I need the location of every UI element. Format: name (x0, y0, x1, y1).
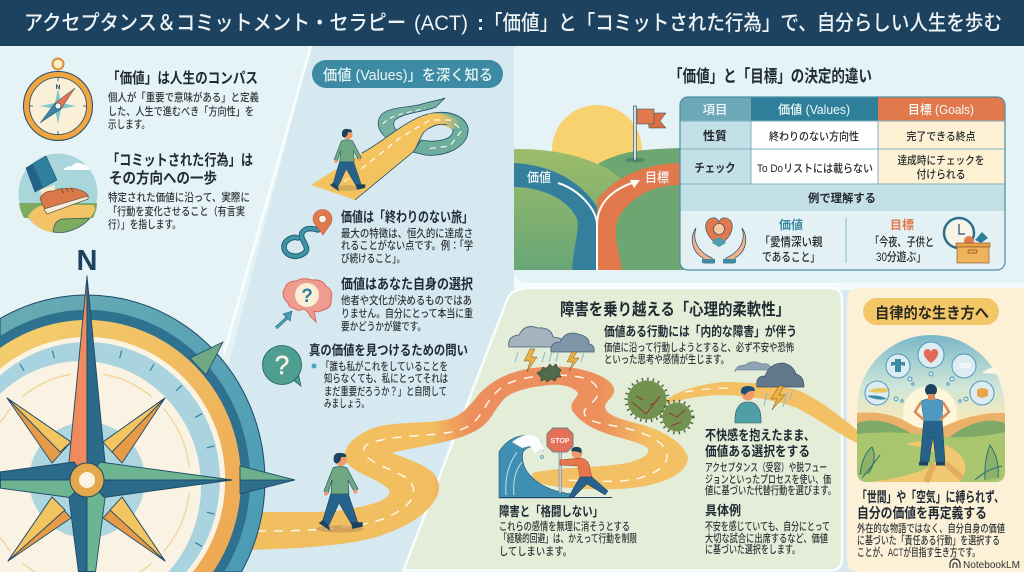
text: internal obstacles (604, 324, 797, 366)
text: endless journey: 価値は「終わりのない旅」 (341, 209, 473, 225)
icon: clock and toy box (944, 218, 990, 263)
text: goal example: 「今夜、子供と (870, 234, 934, 249)
NotebookLM credit: NotebookLM (963, 560, 1020, 571)
icon: thorny bushes (626, 379, 693, 433)
panel: autonomous life (847, 288, 1024, 572)
icon: question speech bubble: ? (275, 350, 289, 380)
text: do not struggle: 障害と「格闘しない」 (499, 504, 603, 519)
table row: nature: 完了できる終点 (906, 129, 976, 143)
heading: psychological flexibility: 障害を乗り越える「心理的柔軟性」 (560, 300, 790, 319)
text: endless journey: れることがない点です。例：「学 (341, 238, 473, 252)
compass north letter: N (77, 245, 97, 277)
table row: nature: 終わりのない方向性 (769, 129, 859, 143)
text: question to find true values: みましょう。 (324, 397, 369, 410)
text: internal obstacles: 価値に沿って行動しようとすると、必ず不安や恐怖 (604, 340, 794, 354)
table header labels: 項目 (702, 103, 728, 117)
table header labels: 目標 (Goals) (908, 102, 974, 117)
table row: nature (703, 128, 976, 143)
compass hub (70, 463, 104, 497)
table row: check (694, 153, 984, 181)
panel: values vs goals (514, 46, 1024, 283)
icon: brain with question mark: ? (301, 286, 313, 307)
panel: left introduction (0, 46, 311, 572)
intro text: committed action: 「行動を変化させること（有言実 (108, 204, 245, 218)
text: question to find true values (309, 342, 468, 410)
text: question to find true values: まだ重要だろうか？」と自問して (324, 384, 447, 398)
winding life road (240, 367, 857, 550)
icon: small compass (24, 58, 92, 140)
intro text: committed action (107, 151, 253, 231)
text: redefine your values: 自分の価値を再定義する (857, 505, 987, 521)
heading pill: values (312, 60, 503, 88)
text: value example: 価値 (779, 217, 803, 232)
illustration: wave and stop sign: STOP (551, 438, 570, 445)
table row: check: 付けられる (916, 168, 966, 181)
table header labels: 価値 (Values) (778, 102, 850, 117)
heading: values vs goals: 「価値」と「目標」の決定的違い (669, 66, 872, 86)
text: concrete example: 不安を感じていても、自分にとって (705, 519, 830, 533)
header bar with title: アクセプタンス＆コミットメント・セラピー (24, 12, 406, 35)
text: endless journey: 最大の特徴は、恒久的に達成さ (341, 226, 473, 240)
text: do not struggle (499, 504, 637, 558)
text: goal example (870, 217, 934, 264)
text: question to find true values: 真の価値を見つけるための問い (309, 342, 468, 358)
illustration: person contemplating values (857, 335, 1005, 482)
intro text: values as compass: 示します。 (108, 118, 150, 131)
text: value choice with discomfort: 値に基づいた代替行動を選びます。 (705, 483, 836, 497)
text: value choice with discomfort: 価値ある選択をする (705, 443, 810, 459)
icon: brain with question mark (276, 279, 332, 328)
icon: foot taking a step (18, 154, 98, 233)
panel separator (224, 46, 311, 353)
text: value choice with discomfort: ジョンといったプロセスを使い、価 (705, 472, 831, 486)
header bar with title: (ACT) (414, 12, 468, 35)
illustration: wave and stop sign (499, 428, 612, 498)
text: value choice with discomfort: 不快感を抱えたまま、 (705, 427, 815, 443)
panel: comparison backdrop (514, 46, 1024, 290)
text: do not struggle: これらの感情を無理に消そうとする (499, 519, 630, 533)
intro text: committed action: 「コミットされた行為」は (107, 151, 253, 169)
icon: person under storm cloud (735, 362, 804, 423)
text: internal obstacles: といった思考や感情が生じます。 (604, 352, 729, 366)
text: your own choice (341, 276, 473, 333)
comparison table (680, 97, 1005, 270)
text: goal example: 目標 (890, 217, 914, 232)
intro text: values as compass: 「価値」は人生のコンパス (107, 70, 258, 87)
text: value example (760, 217, 822, 264)
text: your own choice: りません。自分にとって本当に重 (341, 306, 473, 320)
big compass (0, 276, 295, 572)
text: value choice with discomfort: アクセプタンス（受容）や脱フュー (705, 460, 827, 474)
table row: nature: 性質 (703, 128, 727, 143)
text: concrete example: 大切な試合に出席するなど、価値 (705, 531, 828, 545)
value thought bubbles (865, 342, 994, 405)
icon: hands holding heart (692, 218, 746, 263)
illustration: fork in the road: 価値 (527, 170, 551, 185)
text: value example: 「愛情深い親 (760, 234, 822, 249)
text: endless journey (341, 209, 473, 265)
compass rings (0, 295, 265, 572)
text: do not struggle: してしまいます。 (499, 545, 572, 558)
icon: small thorny burr (537, 364, 561, 382)
walking person on road (316, 453, 364, 532)
table row: check: To Doリストには載らない (757, 162, 873, 175)
panel: psychological flexibility (404, 288, 842, 570)
text: value example: であること」 (762, 250, 820, 264)
table row: check: チェック (694, 161, 736, 175)
table frame and cells (680, 97, 1005, 270)
illustration: fork in the road: 目標 (645, 170, 669, 185)
text: your own choice: 他者や文化が決めるものではあ (341, 293, 472, 307)
intro text: values as compass: した、人生で進むべき「方向性」を (108, 104, 254, 118)
intro text: committed action: その方向への一歩 (109, 169, 217, 187)
illustration: endless road (311, 98, 468, 200)
text: internal obstacles: 価値ある行動には「内的な障害」が伴う (604, 324, 797, 339)
intro text: values as compass (107, 70, 259, 131)
header bar with title: : (477, 12, 484, 35)
heading pill: autonomous life: 自律的な生き方へ (875, 304, 989, 322)
heading pill: autonomous life (863, 298, 999, 325)
table header labels (702, 102, 974, 117)
text: concrete example (705, 503, 830, 556)
diagonal star points (7, 398, 165, 561)
heading pill: values: 価値 (Values)」を深く知る (323, 67, 493, 84)
text: question to find true values: 知らなくても、私にとってそれは (324, 371, 448, 385)
text: endless journey: び続けること」。 (341, 251, 405, 265)
table row: check: 達成時にチェックを (898, 153, 984, 167)
text: value choice with discomfort (705, 427, 836, 497)
cardinal star points (0, 276, 232, 572)
text: concrete example: 具体例 (705, 503, 741, 518)
text: your own choice: 要かどうかが鍵です。 (341, 319, 426, 333)
person with hands on hips (915, 384, 949, 466)
table band: examples: 例で理解する (808, 191, 876, 205)
intro text: committed action: 行）」を指します。 (108, 217, 181, 231)
text: goal example: 30分遊ぶ」 (876, 249, 926, 264)
icon: question speech bubble (262, 346, 302, 386)
icon: storm clouds (509, 327, 594, 372)
intro text: values as compass: 個人が「重要で意味がある」と定義 (108, 90, 259, 104)
intro text: committed action: 特定された価値に沿って、実際に (108, 190, 250, 204)
outer secondary points (190, 342, 295, 494)
compass ticks (20, 351, 215, 546)
text: question to find true values: 「誰も私がこれをしていることを (321, 359, 448, 373)
text: your own choice: 価値はあなた自身の選択 (341, 276, 473, 292)
header bar with title (0, 0, 1024, 46)
illustration: fork in the road (514, 105, 690, 270)
icon: location pin with winding path (284, 210, 332, 256)
text: redefine your values (857, 489, 1005, 559)
text: do not struggle: 「経験的回避」は、かえって行動を制限 (499, 531, 637, 545)
icon: small compass: N (56, 84, 61, 91)
text: concrete example: に基づいた選択をします。 (705, 542, 800, 556)
